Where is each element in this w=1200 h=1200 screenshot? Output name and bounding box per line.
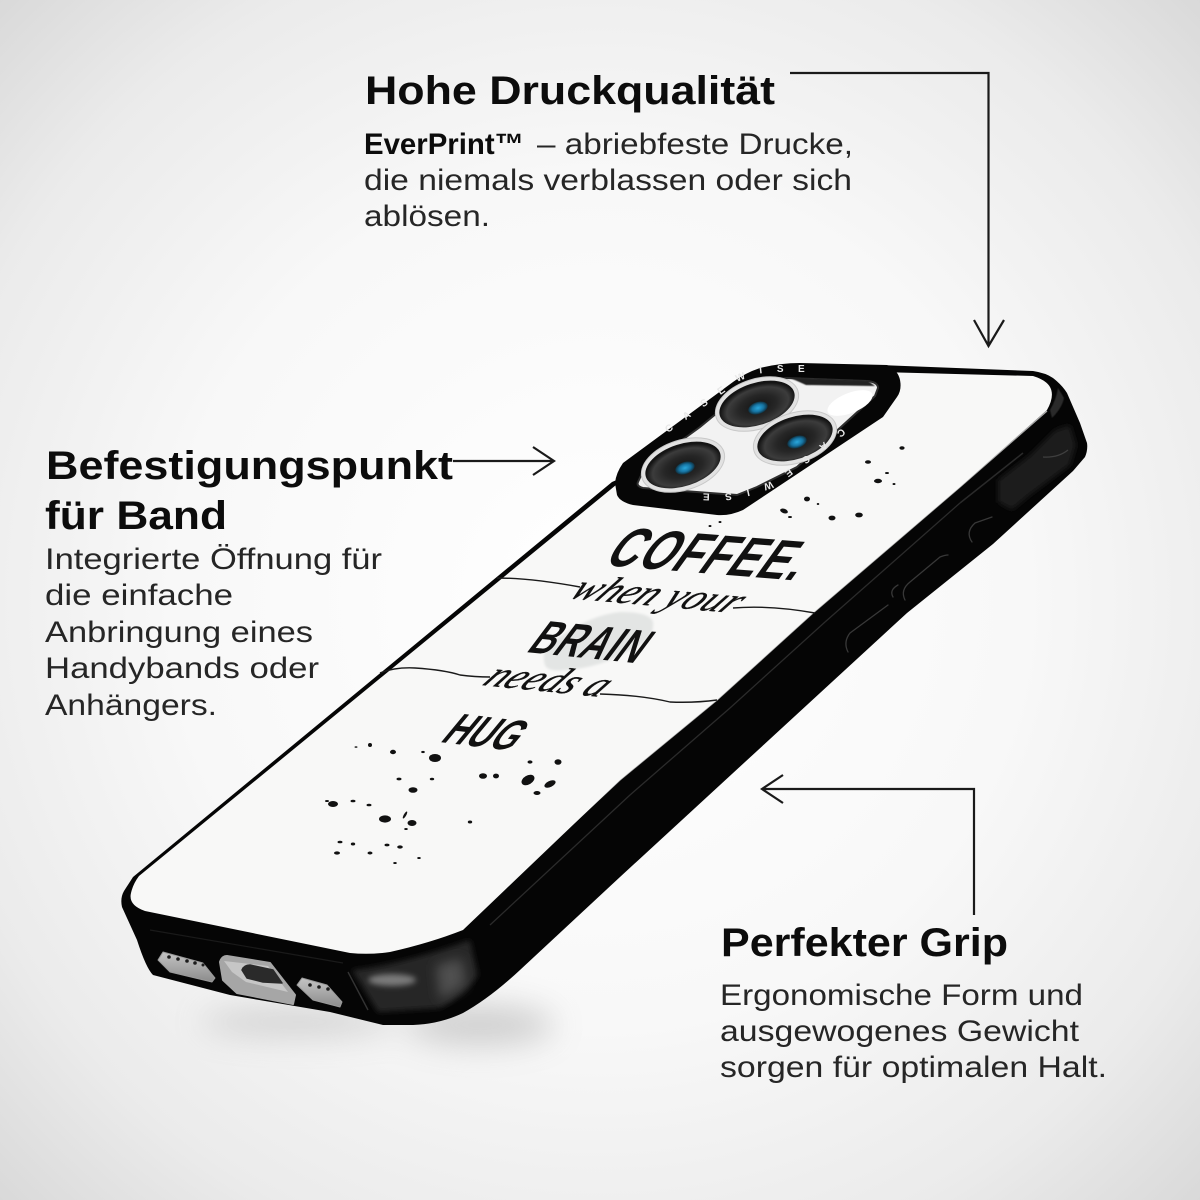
text block: grip description: Ergonomische Form und [720,979,1083,1012]
curved lines [380,578,815,702]
side shading: upper right [960,388,1076,510]
text block: strap description: Handybands oder [45,652,319,685]
text block: grip description: sorgen für optimalen Halt. [720,1051,1107,1084]
camera bump [615,363,901,516]
phone case illustration [121,363,1088,1025]
quote lettering: HUG [431,706,541,760]
text block: strap description: Anbringung eines [45,616,313,649]
heading: Befestigungspunkt für Band: Befestigungspunkt [46,444,453,488]
coffee stain [544,612,653,670]
arrow: strap point [453,447,554,475]
text block: grip description: ausgewogenes Gewicht [720,1015,1079,1048]
bump clear window [638,378,878,495]
text block: print description: ablösen. [364,200,490,233]
side buttons [846,517,992,652]
heading: Hohe Druckqualität: Hohe Druckqualität [365,69,775,113]
callout: Perfekter Grip [720,921,1107,1084]
brand ring text lower: CASEWISE [703,429,845,500]
charging port [220,956,295,1004]
heading: Perfekter Grip: Perfekter Grip [721,921,1008,965]
rear screen print area [131,372,1052,954]
lens: right [746,401,844,475]
text block: grip description [720,979,1107,1084]
inner shadow band [790,378,875,386]
text block: print description: – abriebfeste Drucke, [537,128,853,161]
text block: strap description [45,543,382,722]
heading: Befestigungspunkt für Band: für Band [45,494,227,538]
callout: Hohe Druckqualität [364,69,853,233]
text block: print description [364,128,853,233]
side edge highlight lines [470,411,1047,925]
phone shadow [200,1005,555,1045]
quote lettering: when your [560,568,760,620]
bump frame [615,363,901,515]
speaker grille right [297,978,342,1007]
quote lettering: BRAIN [518,611,666,673]
lens: top [708,367,806,441]
bottom edge seam [150,930,343,963]
arrow: print quality [790,73,1004,346]
bottom corner highlight [348,940,478,1012]
text block: strap description: die einfache [45,579,233,612]
ink splatter [325,446,905,864]
text block: print description: EverPrint™ [364,128,524,161]
quote lettering [431,517,829,760]
speaker grille left [158,952,215,982]
lens: left [634,428,732,502]
heading: Befestigungspunkt für Band [45,444,453,538]
callout: Befestigungspunkt für Band [45,444,453,722]
arrow: grip [762,775,974,915]
text block: strap description: Anhängers. [45,689,217,722]
quote lettering: needs a [474,655,626,704]
brand ring text upper: CASEWISE [666,365,804,432]
case body [121,365,1087,1025]
text block: print description: die niemals verblassen oder sich [364,164,852,197]
text block: strap description: Integrierte Öffnung für [45,543,382,576]
glass highlight [824,385,876,421]
quote lettering: COFFEE. [594,517,829,592]
